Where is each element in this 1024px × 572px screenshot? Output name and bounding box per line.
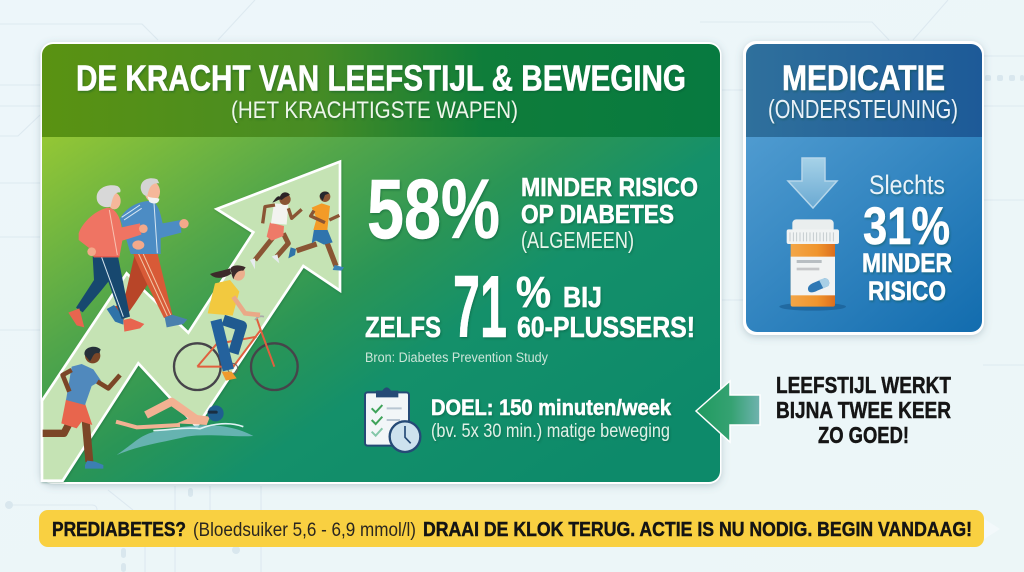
panel heading: MEDICATIE [782, 59, 945, 98]
figure: runner woman top [250, 192, 302, 269]
stat: 71 percent [365, 257, 695, 356]
stat: 71 percent: 60-PLUSSERS! [517, 312, 695, 344]
arrow: comparison pointing to green panel [696, 381, 760, 442]
callout: lifestyle works twice as well: BIJNA TWEE KEER [776, 397, 951, 423]
stat: 71 percent: ZELFS [365, 312, 441, 344]
banner: prediabetes call to action: PREDIABETES? [52, 519, 186, 541]
stat: 31 percent: MINDER [862, 248, 952, 278]
rising arrow [42, 162, 340, 481]
panel: leefstijl en beweging [40, 42, 722, 484]
goal text: DOEL: 150 minuten/week [431, 395, 672, 420]
icon: down arrow [788, 158, 837, 208]
source note: Bron: Diabetes Prevention Study [365, 350, 548, 365]
panel heading [768, 59, 958, 124]
figure: swimmer [116, 402, 253, 455]
stat: 58 percent: MINDER RISICO [521, 172, 698, 202]
stat: 31 percent: RISICO [868, 276, 946, 306]
stat: 31 percent [862, 170, 952, 306]
figure: runner man bottom left [43, 347, 120, 469]
stat: 71 percent: % [516, 268, 551, 317]
stat: 58 percent [367, 162, 698, 256]
figure: runner man top [288, 191, 344, 271]
figure: older man walking [107, 178, 189, 327]
panel heading: (HET KRACHTIGSTE WAPEN) [231, 97, 518, 124]
panel heading: (ONDERSTEUNING) [768, 96, 958, 124]
stat: 58 percent: (ALGEMEEN) [521, 227, 634, 253]
banner: prediabetes call to action: (Bloedsuiker 5,6 - 6,9 mmol/l) [193, 520, 416, 541]
stat: 31 percent: 31% [863, 197, 950, 256]
panel heading [76, 58, 686, 124]
icon: medicine bottle [779, 219, 846, 311]
figure: cyclist [174, 265, 298, 390]
callout: lifestyle works twice as well: ZO GOED! [818, 422, 909, 448]
callout: lifestyle works twice as well [776, 372, 951, 448]
icon: clipboard with clock [365, 387, 420, 452]
banner: prediabetes call to action [39, 510, 1000, 548]
goal text [431, 395, 672, 442]
callout: lifestyle works twice as well: LEEFSTIJL WERKT [776, 372, 951, 398]
stat: 58 percent: OP DIABETES [521, 199, 674, 229]
stat: 58 percent: 58% [367, 162, 500, 256]
panel heading: DE KRACHT VAN LEEFSTIJL & BEWEGING [76, 58, 686, 98]
illustration: people moving on a rising arrow [42, 162, 344, 481]
goal text: (bv. 5x 30 min.) matige beweging [431, 421, 670, 442]
stat: 71 percent: BIJ [563, 282, 602, 314]
stat: 31 percent: Slechts [869, 170, 945, 200]
stat: 71 percent: 71 [453, 257, 507, 356]
panel: medicatie [743, 41, 984, 335]
figure: older woman walking [68, 185, 148, 332]
